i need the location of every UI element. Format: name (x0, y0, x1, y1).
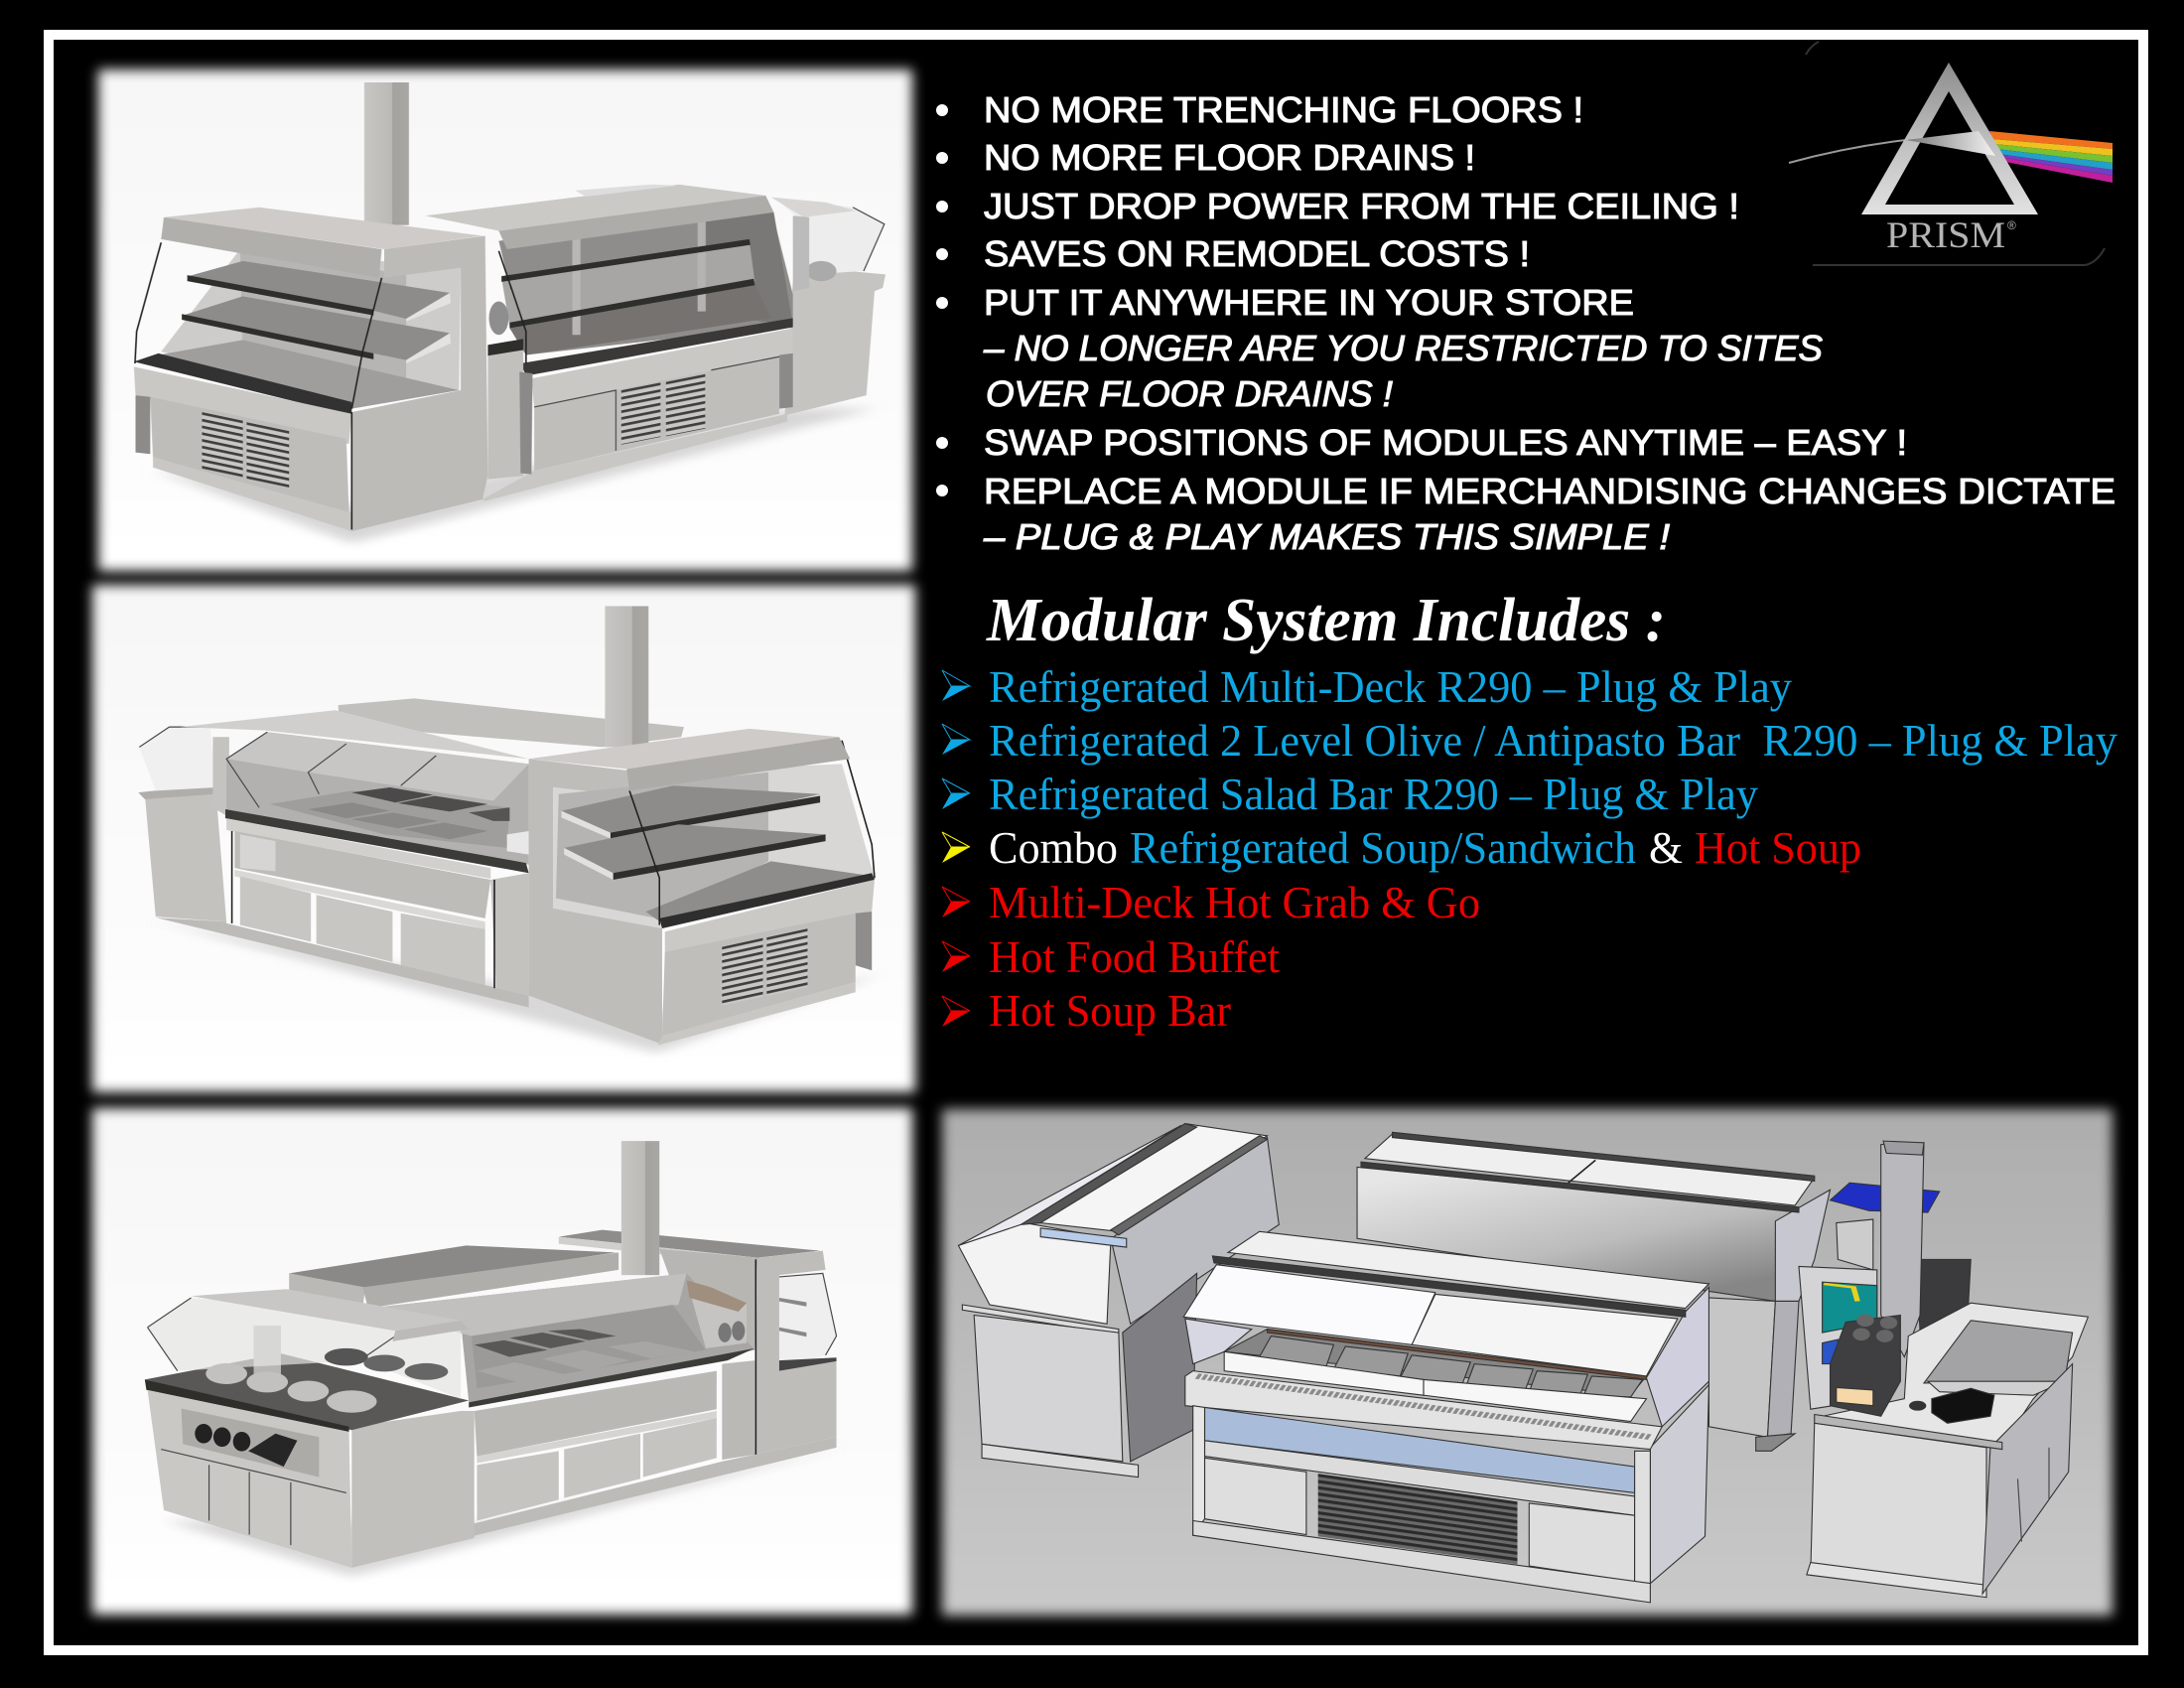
arrow bullet red (942, 887, 970, 917)
panel: soup and salad combo render (92, 1108, 912, 1615)
rear CAD module (1357, 1132, 1831, 1451)
arrow bullet yellow (942, 832, 970, 863)
item 4: Combo (989, 822, 1118, 873)
unit illustration 2 (138, 606, 880, 1053)
arrow bullet blue (942, 778, 970, 809)
benefit 2: NO MORE FLOOR DRAINS ! (984, 137, 1475, 178)
benefits list (936, 89, 2116, 557)
item 4 (989, 822, 1861, 873)
benefit 1: NO MORE TRENCHING FLOORS ! (984, 89, 1583, 130)
item 6: Hot Food Buffet (989, 931, 1280, 982)
left CAD module (958, 1124, 1279, 1477)
rainbow (1989, 131, 2113, 183)
module list (942, 661, 2117, 1036)
heading: Modular System Includes: Modular System Includes : (986, 587, 1666, 654)
bullet dots (936, 104, 948, 496)
front CAD module (1183, 1231, 1708, 1603)
benefit 6: SWAP POSITIONS OF MODULES ANYTIME – EASY ! (984, 422, 1907, 463)
item 5: Multi-Deck Hot Grab & Go (989, 877, 1480, 927)
unit illustration 3 (145, 1141, 842, 1577)
panel: multi-deck render (98, 70, 912, 571)
right CAD module (1799, 1141, 2088, 1598)
unit illustration 1 (134, 82, 886, 543)
item 2: Refrigerated 2 Level Olive / Antipasto Bar R290 – Plug & Play (989, 715, 2117, 766)
panel: salad bar render (92, 585, 915, 1092)
PRISM wordmark: PRISM (1886, 215, 2005, 256)
panel 1 backdrop (98, 70, 912, 571)
item 3: Refrigerated Salad Bar R290 – Plug & Play (989, 769, 1758, 819)
light inside prism (1906, 131, 1995, 156)
benefit 4: SAVES ON REMODEL COSTS ! (984, 233, 1530, 274)
panel: CAD exploded view (942, 1109, 2113, 1616)
item 4: Refrigerated Soup/Sandwich (1130, 822, 1636, 873)
benefit 5 note line 2: OVER FLOOR DRAINS ! (986, 373, 1393, 414)
item 4: & (1649, 822, 1683, 873)
panel 2 backdrop (92, 585, 915, 1092)
CAD illustration (958, 1124, 2088, 1603)
logo: Prism (1789, 42, 2113, 265)
prism triangle (1861, 63, 2038, 214)
registered mark: ® (2007, 218, 2016, 232)
panel 4 backdrop (942, 1109, 2113, 1616)
benefit 5: PUT IT ANYWHERE IN YOUR STORE (984, 282, 1634, 323)
logo frame (1806, 42, 2105, 265)
panel 3 backdrop (92, 1108, 912, 1615)
benefit 5 note line 1: – NO LONGER ARE YOU RESTRICTED TO SITES (983, 328, 1823, 368)
benefit 7 note: – PLUG & PLAY MAKES THIS SIMPLE ! (983, 516, 1670, 557)
arrow bullet red (942, 996, 970, 1027)
arrow bullet blue (942, 724, 970, 755)
item 1: Refrigerated Multi-Deck R290 – Plug & Play (989, 661, 1792, 712)
item 4: Hot Soup (1695, 822, 1861, 873)
incoming ray (1789, 140, 1906, 163)
benefit 3: JUST DROP POWER FROM THE CEILING ! (984, 186, 1739, 226)
arrow bullet red (942, 941, 970, 972)
item 7: Hot Soup Bar (989, 985, 1231, 1036)
benefit 7: REPLACE A MODULE IF MERCHANDISING CHANGES DICTATE (984, 471, 2116, 511)
arrow bullet blue (942, 670, 970, 701)
